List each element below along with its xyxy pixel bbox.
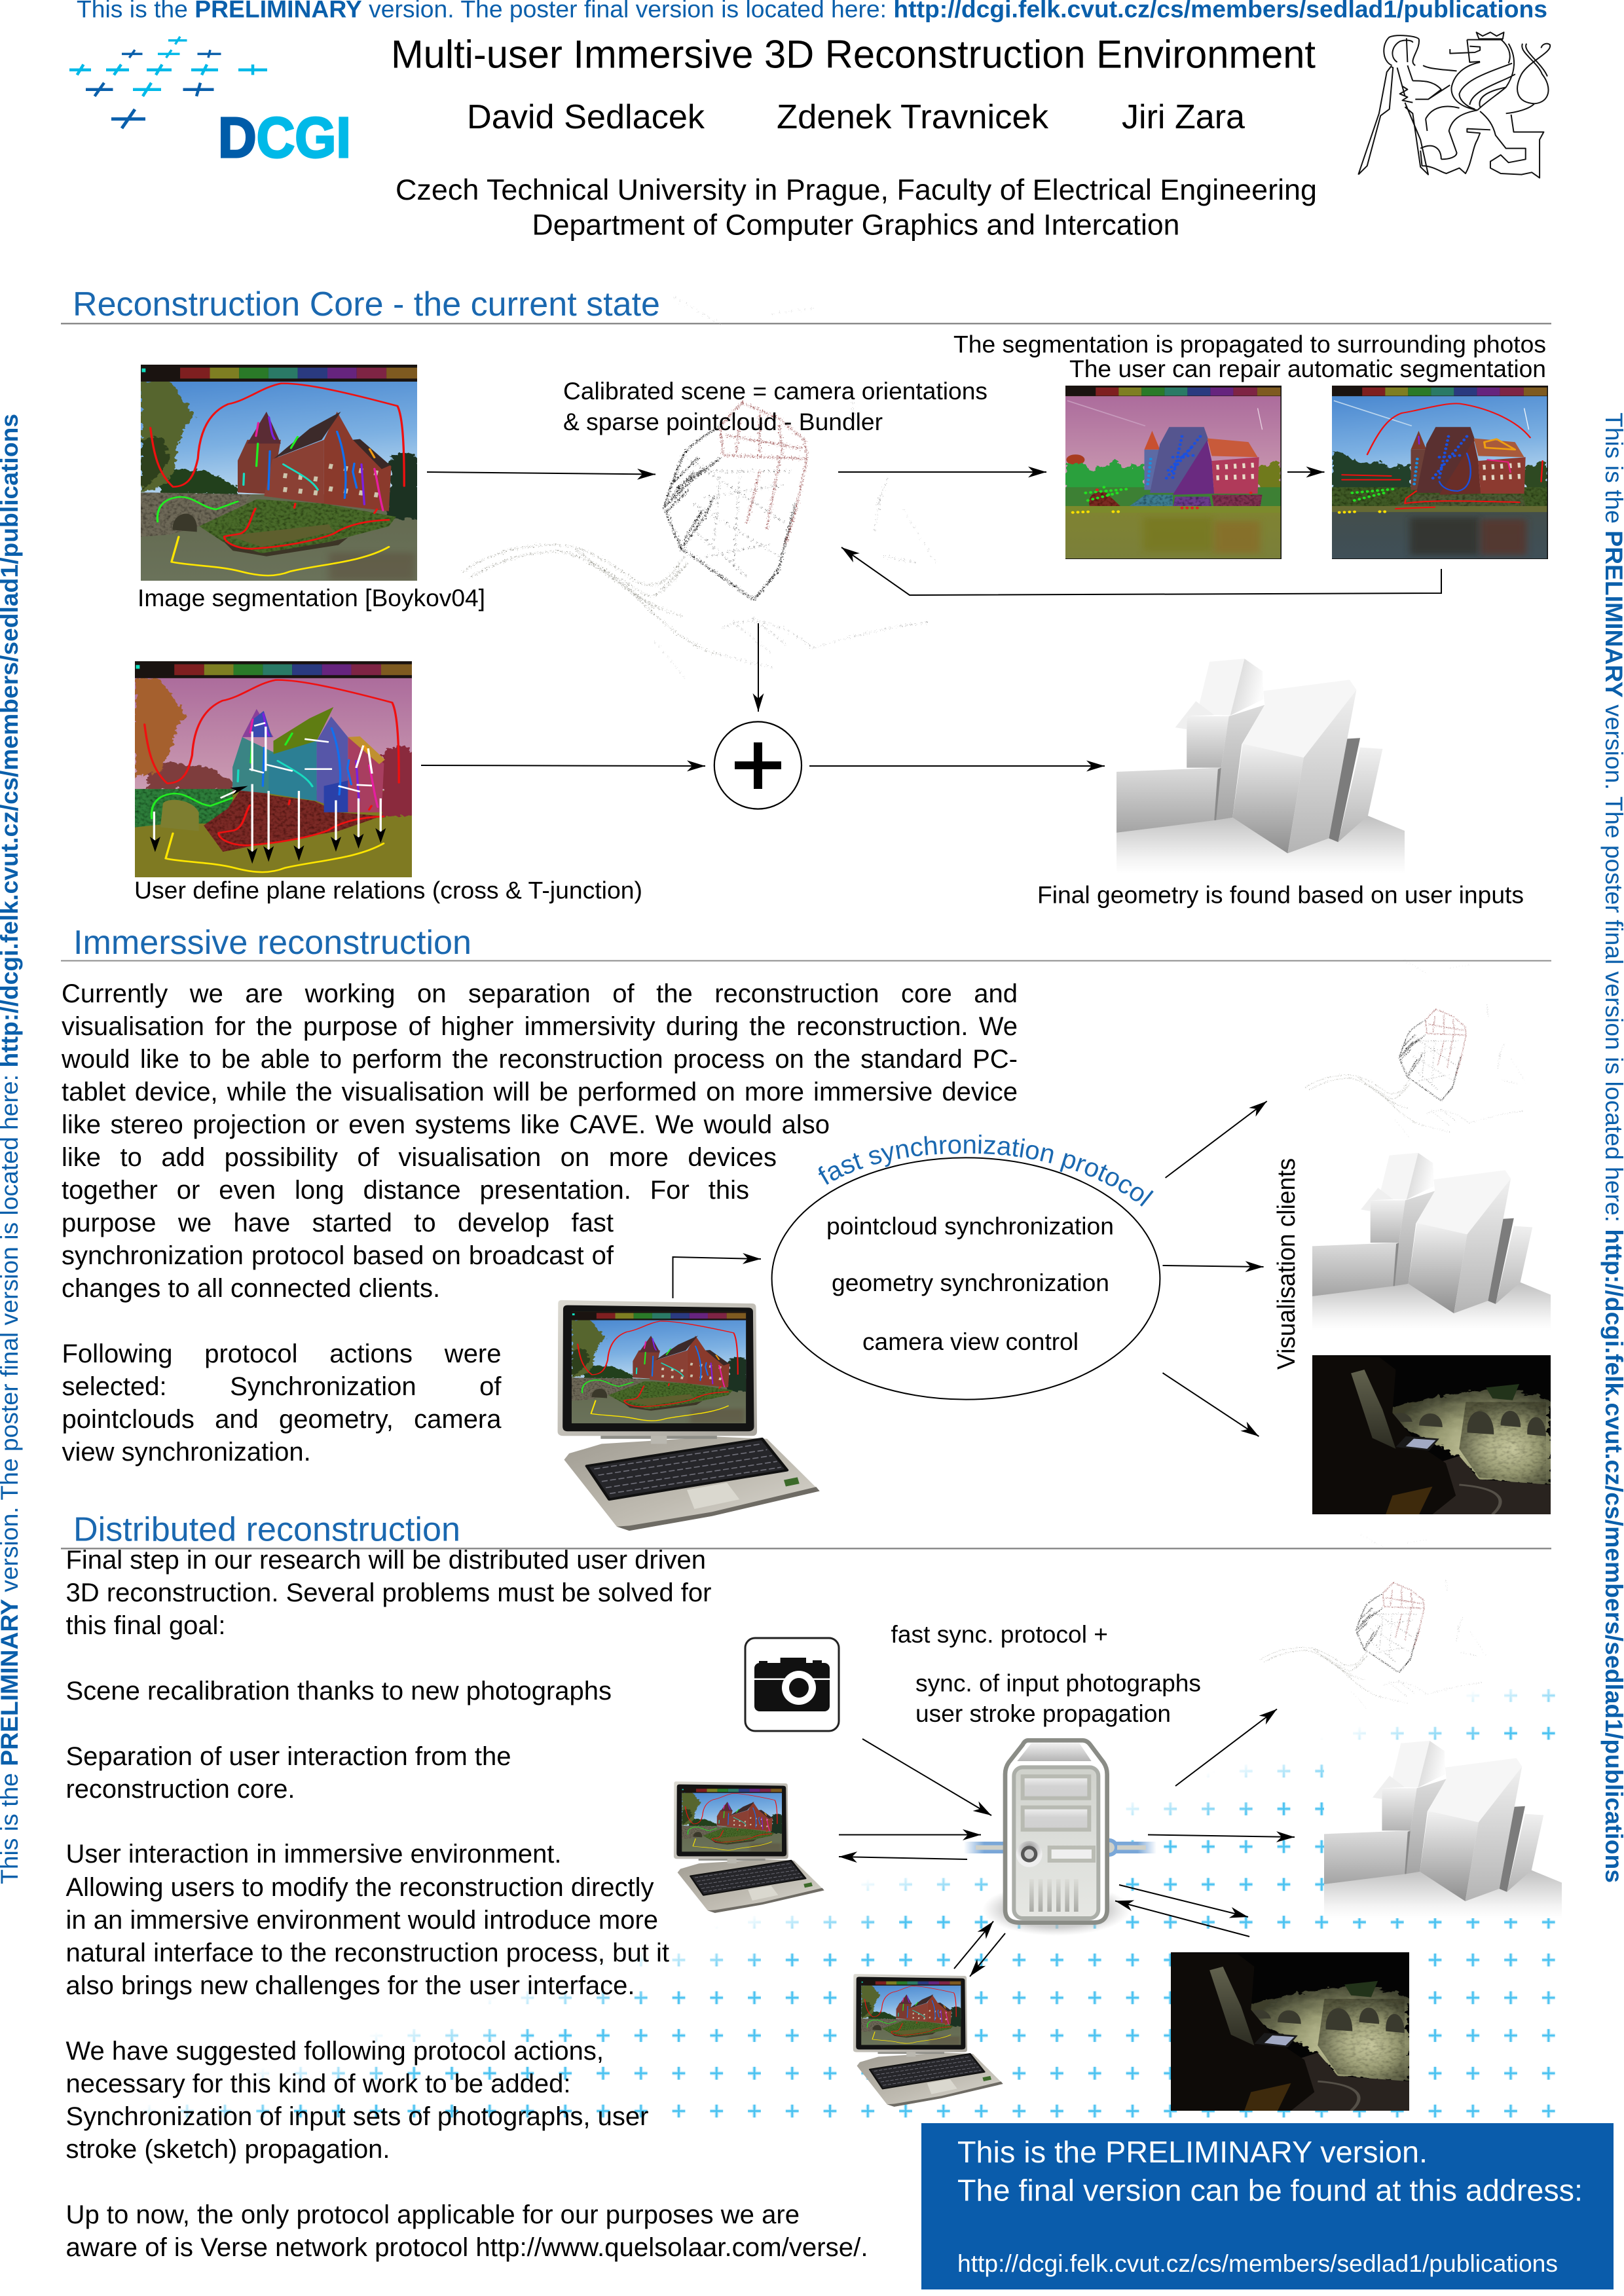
label: calibrated scene: & sparse pointcloud - Bundler xyxy=(563,409,883,435)
DCGI logo: DCGI xyxy=(218,106,351,170)
title: Multi-user Immersive 3D Reconstruction Environment xyxy=(391,32,1316,76)
text block: distributed reconstruction: Synchronization of input sets of photographs, user xyxy=(65,2102,648,2131)
arrow: laptop to protocol xyxy=(673,1257,761,1298)
image: geometry client xyxy=(1324,1740,1562,1918)
text block: immersive paragraph two: pointclouds and geometry, camera xyxy=(62,1405,502,1434)
arrow: between photos xyxy=(1287,471,1324,473)
callout: preliminary notice xyxy=(921,2123,1614,2289)
text block: immersive paragraph one: would like to be able to perform the reconstruction process on the standard PC- xyxy=(62,1045,1018,1074)
text block: immersive paragraph one: changes to all connected clients. xyxy=(62,1274,440,1303)
text block: distributed reconstruction: this final goal: xyxy=(65,1611,225,1640)
text block: immersive paragraph one xyxy=(62,979,1018,1303)
text block: immersive paragraph one: synchronization protocol based on broadcast of xyxy=(62,1241,614,1270)
arrow: feedback to cloud xyxy=(841,547,1441,595)
text block: distributed reconstruction: Separation of user interaction from the xyxy=(65,1742,511,1771)
photo: propagated segmentation xyxy=(1065,386,1282,559)
text block: distributed reconstruction: reconstruction core. xyxy=(65,1775,295,1804)
caption: final geometry: Final geometry is found based on user inputs xyxy=(1037,881,1524,909)
text block: immersive paragraph two: selected: Synchronization of xyxy=(62,1372,502,1401)
arrow: cloud to plus xyxy=(758,623,759,712)
icon: server tower xyxy=(964,1740,1156,1936)
text block: immersive paragraph one: purpose we have started to develop fast xyxy=(62,1209,614,1237)
label: sync protocol xyxy=(891,1621,1201,1727)
text block: immersive paragraph one: like stereo projection or even systems like CAVE. We would also xyxy=(62,1110,830,1139)
authors: Jiri Zara xyxy=(1122,98,1245,136)
authors: Zdenek Travnicek xyxy=(777,98,1049,136)
affiliation: Department of Computer Graphics and Intercation xyxy=(532,210,1180,241)
icon: plus in circle xyxy=(714,721,802,809)
text block: distributed reconstruction: We have suggested following protocol actions, xyxy=(65,2037,604,2066)
label: calibrated scene xyxy=(563,378,987,435)
text block: distributed reconstruction: Up to now, the only protocol applicable for our purposes we are xyxy=(65,2200,800,2229)
text block: distributed reconstruction: natural interface to the reconstruction process, but it xyxy=(65,1939,669,1967)
authors: David Sedlacek xyxy=(467,98,705,136)
text block: immersive paragraph one: Currently we are working on separation of the reconstruction core and xyxy=(62,979,1018,1008)
affiliation: Czech Technical University in Prague, Faculty of Electrical Engineering xyxy=(396,174,1317,206)
text block: distributed reconstruction: Final step in our research will be distributed user driven xyxy=(65,1546,706,1575)
panel: distributed reconstruction xyxy=(61,1511,1562,2262)
callout: preliminary notice: This is the PRELIMINARY version. xyxy=(957,2135,1428,2169)
image: laptop client bottom xyxy=(853,1974,1003,2107)
affiliation xyxy=(396,174,1317,241)
image: final geometry xyxy=(1116,658,1405,874)
DCGI logo xyxy=(69,37,351,170)
arrow: cloud to propagated photo xyxy=(838,471,1046,473)
label: sync protocol: sync. of input photographs xyxy=(915,1670,1201,1697)
photo: plane relations xyxy=(135,661,415,877)
caption: image segmentation: Image segmentation [Boykov04] xyxy=(138,585,485,611)
icon: camera xyxy=(745,1638,839,1731)
university lion emblem xyxy=(1358,32,1550,178)
text block: immersive paragraph one: together or even long distance presentation. For this xyxy=(62,1176,749,1205)
panel: immersive reconstruction xyxy=(61,924,1551,1531)
arrows: network connections xyxy=(839,1709,1295,1977)
label: propagation: The segmentation is propagated to surrounding photos xyxy=(953,331,1546,357)
protocol ellipse: fast synchronization protocol xyxy=(819,1135,1154,1207)
label: calibrated scene: Calibrated scene = camera orientations xyxy=(563,378,987,405)
text block: distributed reconstruction: aware of is Verse network protocol http://www.quelsolaar.com/verse/. xyxy=(65,2233,868,2262)
image: laptop client left xyxy=(674,1781,824,1913)
text block: distributed reconstruction: Scene recalibration thanks to new photographs xyxy=(65,1677,612,1705)
text block: distributed reconstruction xyxy=(65,1546,868,2262)
text block: distributed reconstruction: also brings new challenges for the user interface. xyxy=(65,1971,635,2000)
callout: preliminary notice: The final version can be found at this address: xyxy=(957,2174,1583,2208)
heading: reconstruction core: Reconstruction Core - the current state xyxy=(73,285,660,323)
text block: distributed reconstruction: necessary for this kind of work to be added: xyxy=(65,2069,571,2098)
arrow: to cave xyxy=(1163,1373,1259,1436)
image: laptop xyxy=(558,1300,820,1531)
label: visualisation clients: Visualisation clients xyxy=(1273,1158,1301,1370)
callout: preliminary notice: http://dcgi.felk.cvut.cz/cs/members/sedlad1/publications xyxy=(957,2250,1558,2277)
label: propagation xyxy=(953,331,1546,382)
image: geometry client xyxy=(1312,1152,1551,1330)
authors xyxy=(467,98,1245,136)
arrow: relations to plus xyxy=(421,765,705,766)
text block: distributed reconstruction: 3D reconstruction. Several problems must be solved for xyxy=(65,1578,711,1607)
text block: immersive paragraph two: Following protocol actions were xyxy=(62,1339,502,1368)
point cloud xyxy=(464,298,936,681)
text block: immersive paragraph two xyxy=(62,1339,502,1467)
background plus pattern xyxy=(111,1689,1555,2117)
panel: reconstruction core xyxy=(61,285,1551,909)
image: point cloud client xyxy=(1261,1535,1486,1709)
text block: distributed reconstruction: stroke (sketch) propagation. xyxy=(65,2135,390,2164)
text block: distributed reconstruction: in an immersive environment would introduce more xyxy=(65,1906,658,1935)
text block: distributed reconstruction: Allowing users to modify the reconstruction directly xyxy=(65,1873,654,1902)
photo: cave client xyxy=(1312,1355,1551,1514)
protocol ellipse: camera view control xyxy=(862,1328,1079,1355)
text block: immersive paragraph one: visualisation for the purpose of higher immersivity during the reconstruction. We xyxy=(62,1012,1018,1041)
photo: repaired segmentation xyxy=(1332,386,1548,559)
text block: immersive paragraph two: view synchronization. xyxy=(62,1438,311,1467)
photo: cave client xyxy=(1171,1952,1409,2111)
text block: immersive paragraph one: like to add possibility of visualisation on more devices xyxy=(62,1143,777,1172)
text block: distributed reconstruction: User interaction in immersive environment. xyxy=(65,1840,562,1868)
heading: distributed reconstruction: Distributed reconstruction xyxy=(73,1511,460,1549)
arrow: up to point cloud xyxy=(1166,1101,1267,1178)
protocol ellipse: pointcloud synchronization xyxy=(826,1213,1114,1240)
label: sync protocol: user stroke propagation xyxy=(915,1700,1171,1727)
protocol ellipse: geometry synchronization xyxy=(832,1269,1109,1296)
caption: plane relations: User define plane relations (cross & T-junction) xyxy=(134,877,642,903)
label: propagation: The user can repair automatic segmentation xyxy=(1069,355,1546,382)
arrow: plus to geometry xyxy=(809,765,1105,767)
image: point cloud client xyxy=(1306,960,1526,1139)
label: sync protocol: fast sync. protocol + xyxy=(891,1621,1108,1648)
protocol ellipse xyxy=(771,1135,1160,1400)
heading: immersive reconstruction: Immerssive reconstruction xyxy=(73,924,471,962)
arrow: segmentation to cloud xyxy=(427,472,655,474)
photo: image segmentation xyxy=(141,365,420,581)
text block: immersive paragraph one: tablet device, while the visualisation will be performed on more immersive device xyxy=(62,1078,1018,1106)
arrow: to geometry xyxy=(1163,1266,1264,1267)
